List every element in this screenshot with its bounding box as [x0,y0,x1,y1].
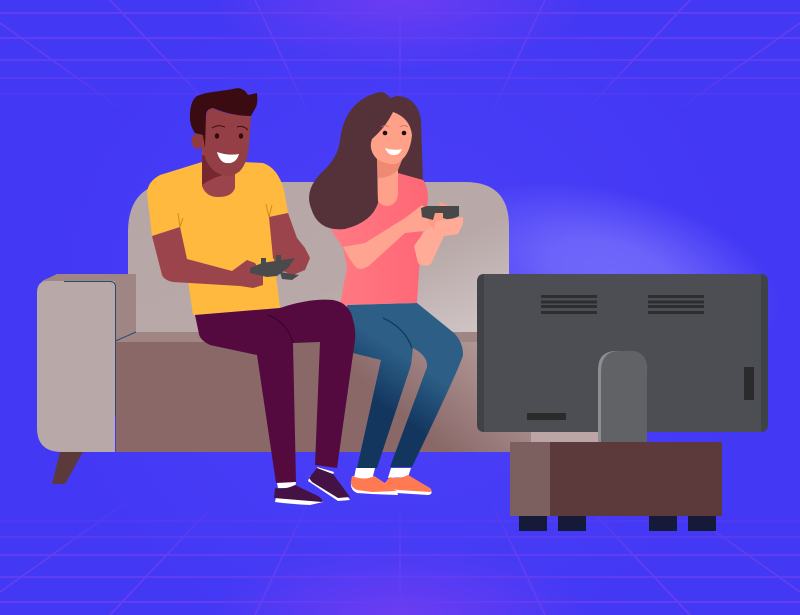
woman near arm [343,205,436,269]
man knee crease [268,315,293,343]
man controller [250,255,299,280]
television [477,274,768,442]
man far arm [269,213,310,275]
tv cabinet [510,442,722,531]
man [147,88,355,505]
woman far hand fingers [434,217,463,236]
sofa [37,182,601,484]
man neck [202,148,235,197]
sofa backrest [128,182,509,340]
woman jeans [347,303,463,468]
man neck shadow [202,155,235,185]
man near arm and hand [152,227,263,288]
tv stand [598,351,647,442]
man pants [195,300,355,483]
man ear [192,133,204,149]
woman brows [381,126,408,127]
woman back hair [392,96,423,182]
woman [309,92,463,495]
man hair [190,88,257,148]
woman controller [421,206,459,220]
woman eyes [383,131,406,135]
sofa arm front [37,281,115,452]
sofa leg [52,452,83,484]
cabinet feet [519,516,716,531]
woman shoes and socks [351,468,432,495]
man t-shirt [147,162,288,315]
woman front hair [309,92,421,229]
man eyes [215,133,243,139]
man sleeve folds [178,204,272,227]
tv vents [541,295,704,314]
sofa arm side [42,274,136,342]
tv body [477,274,768,432]
sofa seat [116,332,601,452]
man shoes and socks [274,467,350,505]
woman neck [377,158,398,206]
man smile [217,152,239,163]
woman top [330,173,428,305]
woman far arm [414,222,445,266]
woman far hand palm [428,212,445,230]
man brows [212,126,248,130]
woman neck shadow [377,158,402,178]
woman face [371,112,412,164]
sofa seam line [64,282,136,416]
man face [202,108,251,176]
tv ports [527,367,754,420]
woman smile [385,148,402,155]
woman knee crease [383,318,412,348]
tv side edges [477,274,768,432]
woman far hand thumb [438,202,452,212]
